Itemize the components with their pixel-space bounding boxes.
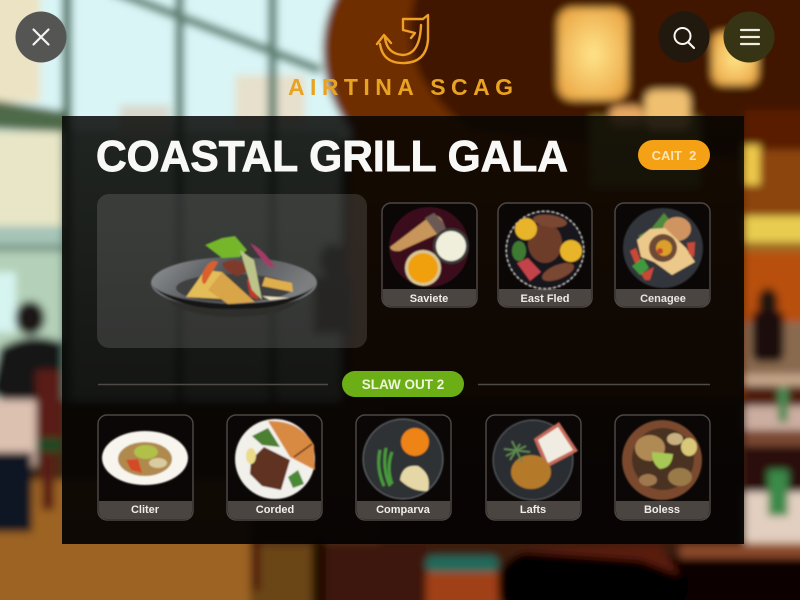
lower room [0, 400, 380, 600]
label: Corded: Corded [256, 504, 294, 516]
window area [0, 0, 350, 140]
tile: Comparva [356, 415, 451, 520]
icon: plate with stuffed flatbread [623, 208, 703, 288]
icon: white bowl with stew [102, 431, 188, 485]
icon: plate with toast, rice and herbs [493, 420, 578, 500]
tile: Saviete [382, 203, 477, 307]
icon: steak plate with flatbread [235, 419, 315, 499]
hero dish card [97, 194, 367, 348]
brand name: AIRTINA SCAG [288, 74, 513, 100]
diner silhouette [15, 301, 45, 335]
title: COASTAL GRILL GALA [96, 132, 568, 181]
label: Cenagee: Cenagee [640, 293, 686, 305]
icon: clay bowl with lime [622, 420, 702, 500]
warm ceiling [323, 0, 800, 400]
icon: logo hook mark [377, 15, 428, 63]
label: Comparva: Comparva [376, 504, 431, 516]
label: Saviete: Saviete [410, 293, 448, 305]
badge: SLAW OUT 2: SLAW OUT 2 [362, 377, 444, 392]
button: menu [724, 12, 774, 62]
icon: hero plate with salad [151, 236, 317, 317]
label: Lafts: Lafts [520, 504, 546, 516]
tile: Corded [227, 415, 322, 520]
tile: Lafts [486, 415, 581, 520]
label: Boless: Boless [644, 504, 680, 516]
label: East Fled: East Fled [521, 293, 569, 305]
button: close [16, 12, 66, 62]
icon: dark plate with orange, beans and bread [363, 419, 443, 499]
badge: CAIT 2: CAIT 2 [652, 148, 696, 163]
hanging lamps [558, 8, 628, 100]
right side guests and bottles [758, 288, 778, 316]
main dark panel [62, 116, 744, 544]
tile: Cenagee [615, 203, 710, 307]
tile: East Fled [498, 203, 592, 307]
tile: Boless [615, 415, 710, 520]
tile: Cliter [98, 415, 193, 520]
icon: dish with wrap and sauces [389, 207, 469, 287]
badge: CAIT 2 [638, 140, 710, 170]
person behind panel [318, 243, 346, 277]
label: Cliter: Cliter [131, 504, 160, 516]
badge: SLAW OUT 2 [342, 371, 464, 397]
button: search [658, 12, 710, 62]
icon: grilled meat plate [506, 211, 584, 289]
